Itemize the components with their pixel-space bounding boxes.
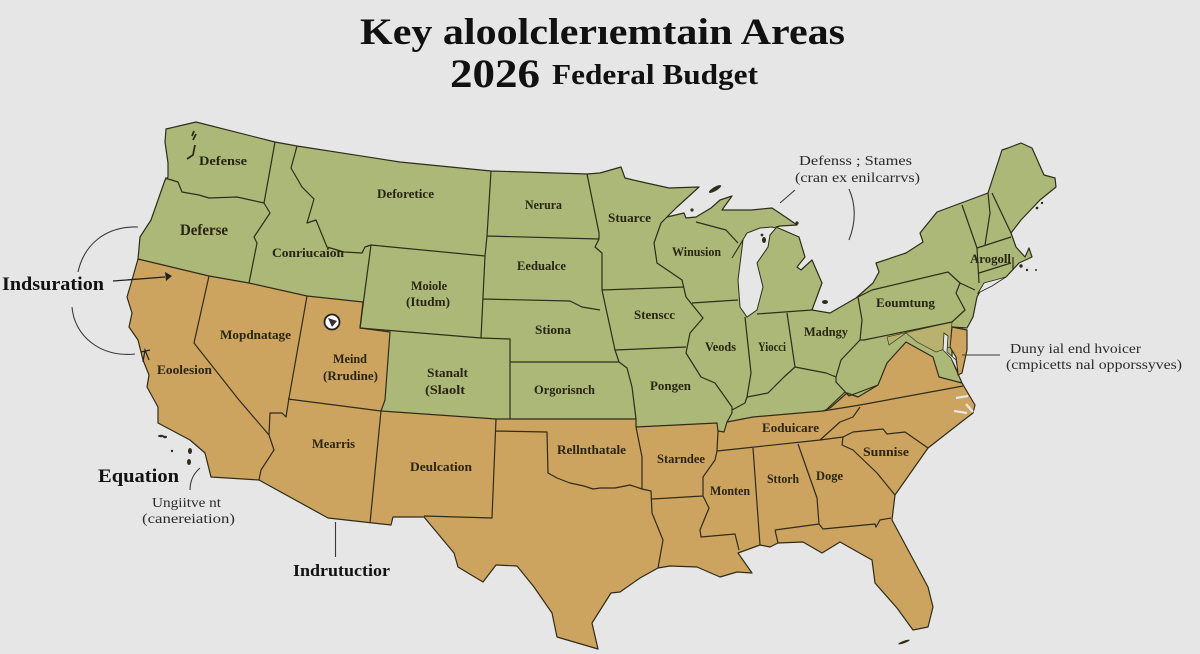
coast islands (158, 184, 1043, 645)
region: orange southern states (127, 259, 975, 649)
lake michigan (732, 227, 776, 317)
label: Stanalt: Stanalt (427, 365, 469, 380)
label: Rellnthatale: Rellnthatale (557, 442, 626, 457)
label: Conriucaion: Conriucaion (272, 245, 345, 260)
label: Slaolt: (Slaolt (425, 382, 466, 397)
label: Moiole: Moiole (411, 278, 447, 293)
label: Eedualce: Eedualce (517, 258, 566, 273)
callout: Equation: Ungiitve nt (152, 496, 221, 511)
state borders: orange (194, 276, 963, 568)
label: Stiona: Stiona (535, 322, 572, 337)
callout: Duny ial end hvoicer: Duny ial end hvoicer (1010, 342, 1141, 357)
callout: Indrutuctior: Indrutuctior (293, 561, 390, 580)
label: Nerura: Nerura (525, 197, 562, 212)
callout: Duny ial end hvoicer (962, 342, 1182, 373)
label: Orgorisnch: Orgorisnch (534, 382, 596, 397)
label: Arogoll: Arogoll (970, 251, 1011, 266)
callout: Equation: Equation (98, 467, 180, 487)
title: Key aloolclerıemtain Areas (360, 12, 845, 53)
puget sound (187, 131, 196, 159)
label: Madngy: Madngy (804, 324, 848, 339)
label: Starndee: Starndee (657, 451, 705, 466)
label: Stuarce: Stuarce (608, 210, 651, 225)
label: Veods: Veods (705, 339, 736, 354)
label: Deulcation: Deulcation (410, 459, 473, 474)
map of states (127, 122, 1056, 649)
callout: Indsuration (2, 227, 172, 362)
title: Federal Budget (552, 60, 759, 91)
callout: Indrutuctior (293, 522, 390, 580)
label: Sunnise: Sunnise (863, 444, 909, 459)
label: Stenscc: Stenscc (634, 307, 675, 322)
label: Eoolesion: Eoolesion (157, 362, 213, 377)
label: Itudm: (Itudm) (406, 294, 450, 309)
title: 2026 (450, 51, 540, 96)
region: Maryland tint (887, 322, 952, 352)
label: Monten: Monten (710, 483, 751, 498)
callout: Equation: (canereiation) (142, 512, 235, 527)
region: Delmarva peninsula (950, 327, 967, 375)
region: green northern states (138, 122, 1056, 440)
callout: Equation (98, 467, 235, 527)
label: Deforetice: Deforetice (377, 186, 434, 201)
callout: Defenss Stames: (cran ex enilcarrvs) (795, 171, 920, 186)
title (360, 12, 845, 96)
label: Pongen: Pongen (650, 378, 692, 393)
label: Yiocci: Yiocci (758, 339, 786, 354)
long island (978, 277, 1006, 293)
state borders: green (165, 142, 1013, 422)
outer banks inlets (954, 396, 973, 413)
label: Meind: Meind (333, 351, 368, 366)
callout: Indsuration: Indsuration (2, 275, 105, 295)
label: Eoduicare: Eoduicare (762, 420, 819, 435)
callout: Duny ial end hvoicer: (cmpicetts nal opporssyves) (1006, 358, 1182, 373)
callout: Defenss Stames: Defenss ; Stames (799, 154, 912, 169)
label: Eoumtung: Eoumtung (876, 295, 935, 310)
label: Mearris: Mearris (312, 436, 355, 451)
label: Defense Washington: Defense (199, 153, 247, 168)
label: Winusion: Winusion (672, 244, 722, 259)
callout: Defenss Stames (780, 154, 920, 240)
icon: location marker (324, 314, 340, 330)
label: Doge: Doge (816, 468, 843, 483)
chesapeake bay (943, 333, 958, 372)
label: Mopdnatage: Mopdnatage (220, 327, 291, 342)
label: Deferse Oregon: Deferse (180, 222, 228, 239)
label: Sttorh: Sttorh (767, 471, 800, 486)
label: Rrudine: (Rrudine) (323, 368, 378, 383)
